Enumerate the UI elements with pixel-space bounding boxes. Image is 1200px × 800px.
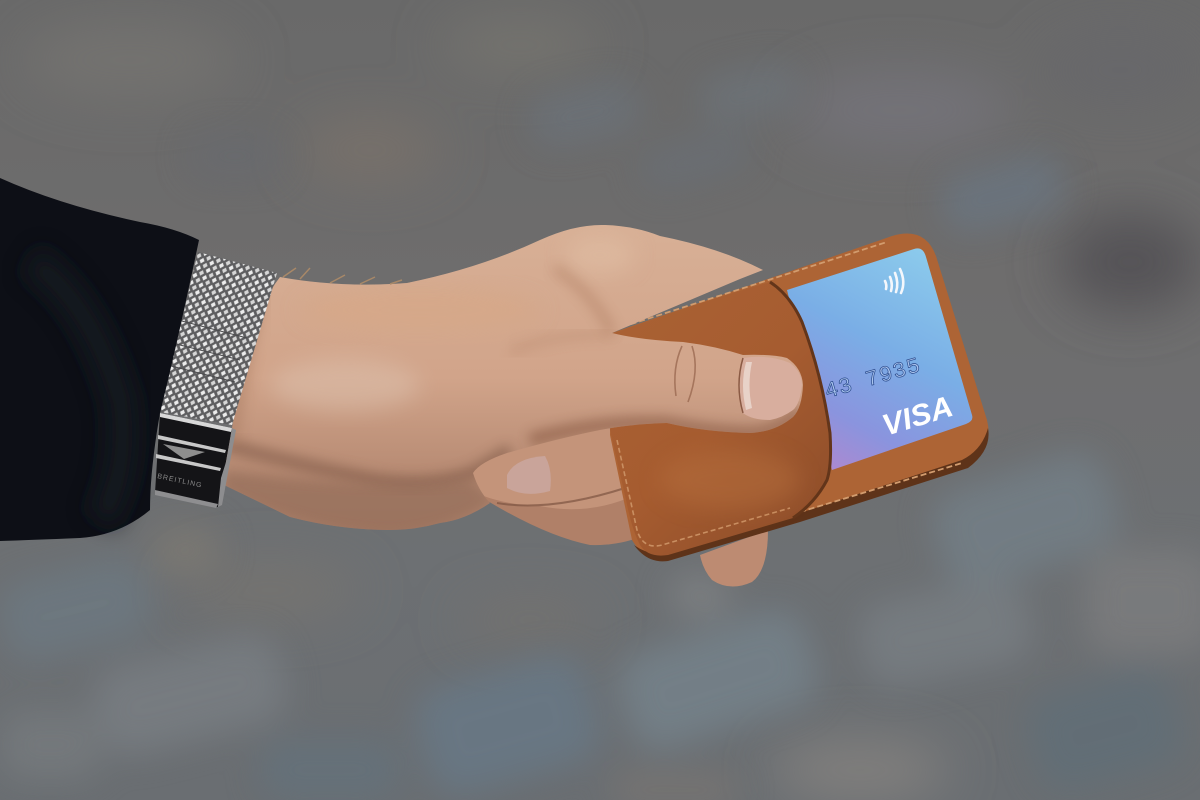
hand back and thumb (220, 225, 803, 535)
wings logo on clasp (163, 444, 205, 459)
clasp (155, 413, 232, 507)
shading near bracelet (232, 319, 264, 433)
front pocket (610, 282, 831, 556)
credit card (787, 248, 972, 470)
index knuckle highlight (580, 246, 620, 266)
palm shadow and crease (225, 445, 510, 484)
card number: 43 7935 (822, 354, 923, 405)
hand shading (220, 235, 800, 535)
jacket sleeve (0, 178, 199, 541)
thumb upper crease (510, 335, 612, 352)
clasp side (218, 428, 236, 507)
finger gap crease (555, 268, 612, 333)
wallet lower edge (634, 428, 989, 561)
pocket stitching (617, 440, 790, 546)
arm hair along wrist (283, 268, 402, 284)
thumb knuckle creases (675, 346, 695, 402)
warm top of hand (300, 288, 540, 332)
thumb underside shadow (530, 410, 800, 440)
watch: mesh bracelet and clasp (155, 252, 277, 508)
contactless symbol (885, 269, 903, 293)
pale highlight on wrist (270, 359, 420, 411)
wallet back with card (610, 234, 989, 561)
fingers curled behind the wallet (462, 428, 768, 587)
band segment lines (167, 320, 247, 382)
lower finger (470, 470, 645, 545)
wallet back panel (610, 234, 988, 560)
pocket highlight (660, 450, 800, 510)
middle finger (462, 428, 635, 509)
back stitching (622, 242, 887, 327)
nail lunula (743, 362, 752, 410)
engraving on clasp: BREITLING (157, 473, 203, 490)
little finger tip below wallet (700, 530, 768, 587)
fingernail (507, 456, 551, 494)
visa logo: VISA (878, 390, 957, 443)
thumbnail (739, 357, 802, 420)
mesh band (160, 252, 277, 425)
